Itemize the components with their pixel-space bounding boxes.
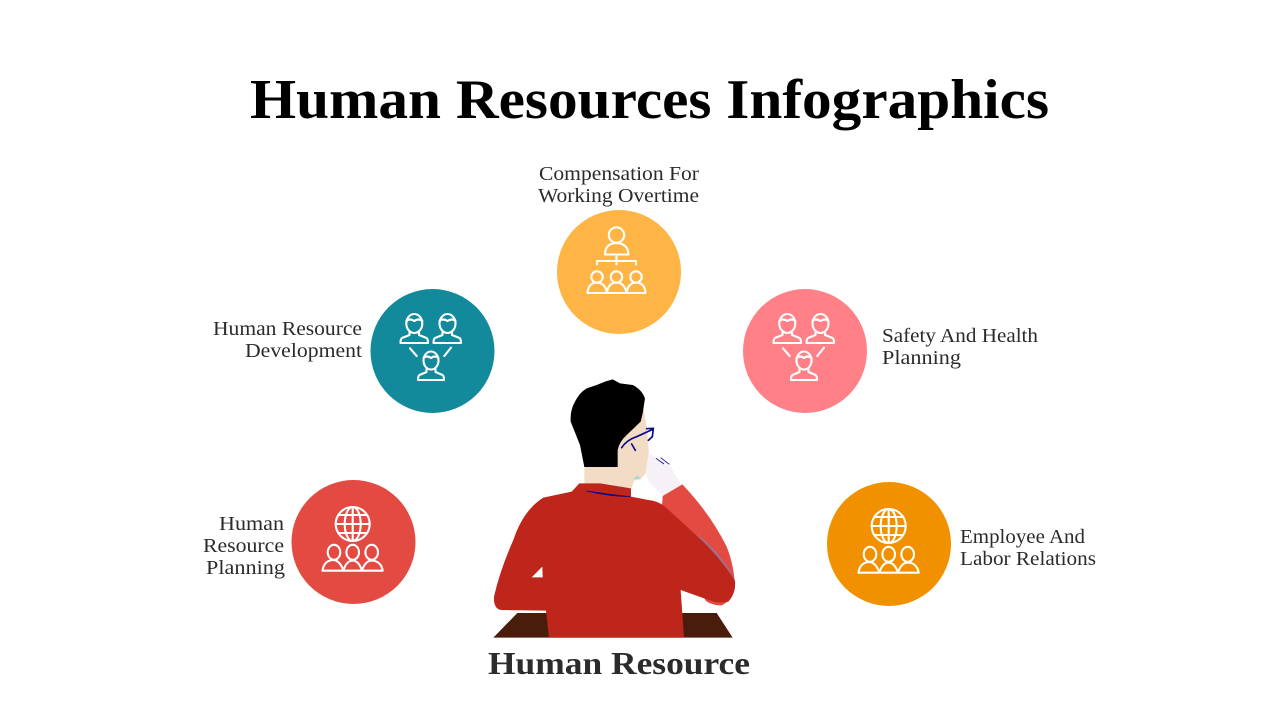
label: compensation [538, 163, 699, 207]
skin: face and neck [584, 403, 649, 490]
panel: human resource development [213, 289, 494, 413]
chin shadow [634, 476, 641, 479]
collar line [587, 491, 630, 497]
illustration: man thinking at desk [493, 379, 735, 638]
fingers [656, 458, 669, 464]
panel: safety and health planning [743, 289, 1038, 413]
circle: pink [743, 289, 867, 413]
label: development: Development [245, 340, 362, 362]
label: compensation: Working Overtime [538, 185, 699, 207]
sleeve shadow [697, 534, 734, 578]
label: employee: Labor Relations [960, 548, 1096, 570]
desk [493, 613, 733, 638]
label: safety [882, 325, 1038, 369]
arm gap [532, 567, 543, 577]
shirt [494, 483, 735, 638]
label: employee: Employee And [960, 526, 1085, 548]
circle: teal [370, 289, 494, 413]
panel: compensation for working overtime [538, 163, 699, 334]
glasses [622, 428, 653, 450]
panel: employee and labor relations [827, 482, 1096, 606]
title: Human Resources Infographics [250, 69, 1049, 131]
label: safety: Planning [882, 347, 961, 369]
icon: org chart of people [588, 227, 646, 293]
label: development: Human Resource [213, 318, 362, 340]
circle: yellow [557, 210, 681, 334]
icon: three people [774, 314, 834, 380]
label: planning [203, 513, 285, 579]
label: employee [960, 526, 1096, 570]
label: planning: Planning [206, 557, 285, 579]
forearm [660, 484, 735, 605]
circle: orange [827, 482, 951, 606]
label: development [213, 318, 362, 362]
hair [571, 379, 645, 467]
icon: three people [400, 314, 461, 380]
caption: Human Resource [488, 645, 750, 681]
label: compensation: Compensation For [539, 163, 699, 185]
label: safety: Safety And Health [882, 325, 1038, 347]
circle: red [292, 480, 416, 604]
label: planning: Human [219, 513, 284, 535]
icon: globe and people [322, 507, 383, 571]
panel: human resource planning [203, 480, 416, 604]
hand [646, 453, 681, 496]
label: planning: Resource [203, 535, 284, 557]
icon: globe and people [858, 509, 919, 573]
